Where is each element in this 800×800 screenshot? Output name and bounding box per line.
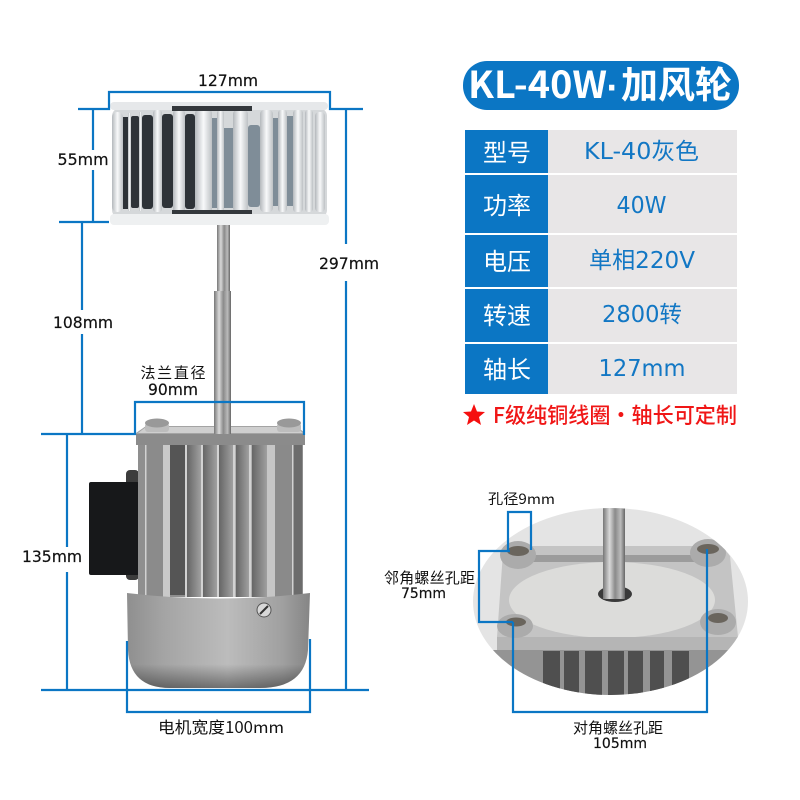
row: voltage: 单相220V [589,248,695,274]
red note: F级纯铜线圈·轴长可定制 [493,399,737,430]
dimension lines: fan wheel width 127mm [78,71,363,109]
row: speed: 2800转 [602,302,682,328]
row: power [465,175,737,233]
row: shaft length: 轴长 [483,350,531,385]
bolt bosses [500,541,536,569]
row: model [465,130,737,173]
row: voltage: 电压 [483,242,531,277]
dimension: motor width 100mm [127,639,310,738]
shaft hole and shaft [598,586,632,602]
fan wheel [110,102,329,225]
title pill: KL-40W [468,55,607,109]
row: shaft length [465,344,737,394]
dimension: adjacent hole spacing 75mm: 邻角螺丝孔距 [384,567,475,588]
dimension: hole diameter 9mm: 孔径9mm [488,489,555,509]
icon: red star [463,404,485,425]
dimension: flange diameter 90mm: 90mm [148,380,198,399]
flange [136,418,305,445]
shaft [214,225,231,436]
row: speed [465,289,737,342]
inset: flange close-up [470,505,750,700]
row: model: KL-40灰色 [584,139,699,165]
row: shaft length: 127mm [598,356,686,382]
title pill: 加风轮 [621,55,732,109]
dimension: diagonal hole spacing 105mm: 对角螺丝孔距 [573,717,663,738]
dimension: hole diameter 9mm [488,489,555,550]
motor body with fins [138,445,303,600]
flange plate [497,546,738,637]
dimension: diagonal hole spacing 105mm: 105mm [593,736,647,752]
dimension: adjacent hole spacing 75mm: 75mm [401,586,446,602]
dimension: motor height 135mm: 135mm [22,547,82,566]
row: model: 型号 [483,133,531,168]
title pill [463,55,739,110]
dimension: flange diameter 90mm: 法兰直径 [140,362,206,383]
title pill: · [606,71,617,106]
dimension: fan height 55mm: 55mm [58,150,108,169]
motor with fan wheel [89,102,329,688]
dimension: fan height 55mm [58,109,109,222]
flange front face and fins [497,637,738,650]
dimension: shaft length 108mm: 108mm [53,313,113,332]
dimension: motor width 100mm: 电机宽度100mm [158,714,284,738]
row: speed: 转速 [483,296,531,331]
spec table [465,130,737,394]
terminal box [89,470,139,580]
dimension: motor height 135mm [22,434,369,690]
row: power: 40W [616,193,666,219]
dimension lines: fan wheel width 127mm: 127mm [198,71,258,90]
dimension: total length 297mm: 297mm [319,254,379,273]
row: power: 功率 [483,186,531,221]
dimension: diagonal hole spacing 105mm [513,549,707,752]
row: voltage [465,235,737,287]
dimension: adjacent hole spacing 75mm [384,551,513,622]
dimension: flange diameter 90mm [41,362,304,435]
end cap [127,593,310,688]
